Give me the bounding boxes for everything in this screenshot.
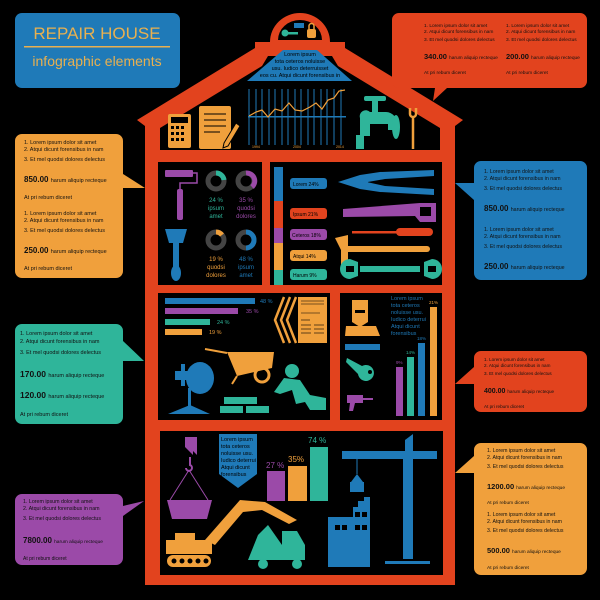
callout: left orange: 2. Atqui dicunt forensibus in nam [24,147,104,153]
icon: notepad and pencil [199,106,240,149]
text block: welder: Iudico deterrui [391,317,426,323]
callout: left purple [15,494,144,565]
icon: faucet [356,96,400,149]
callout: top right red: At pri rebum diceret [506,70,549,76]
bar chart lower: 27 % [266,461,284,470]
callout: left orange: 2. Atqui dicunt forensibus in nam [24,218,104,224]
vertical bar chart [396,300,438,416]
callout: right blue: 1. Lorem ipsum dolor sit amet [484,169,554,175]
callout: top right red: At pri rebum diceret [424,70,467,76]
callout: left orange: 1. Lorem ipsum dolor sit amet [24,140,97,146]
attic banner text: Lorem ipsum [284,52,316,58]
donut charts: 35 % [239,198,253,204]
stacked bar with labels: Harum 9% [293,273,317,279]
document with chevrons [275,297,327,343]
callout: left orange: 3. Et mel quodsi dolores delectus [24,228,105,234]
bar chart lower [266,436,328,501]
text callout: lower: Atqui dicunt [221,465,250,471]
donut charts: 19 % [209,257,223,263]
icon: screwdriver [352,228,433,236]
horizontal bar chart: 24 % [217,320,230,326]
bar chart lower: 35% [288,455,304,464]
donut charts: amet [209,214,223,220]
icon: calculator [168,114,191,148]
callout: top right red [392,13,587,101]
line chart: 1994 [252,145,260,149]
callout: right blue: 2. Atqui dicunt forensibus in nam [484,234,561,240]
donut charts: 24 % [209,198,223,204]
callout: left orange: 250.00 harum aliquip recteque [24,246,107,255]
callout: left teal: 1. Lorem ipsum dolor sit amet [20,331,93,337]
stacked bar with labels: Atqui 14% [293,254,316,260]
horizontal bar chart: 35 % [246,309,259,315]
callout: right orange: At pri rebum diceret [487,565,530,571]
icon: hammer [335,235,430,268]
callout: left orange: 850.00 harum aliquip recteque [24,175,107,184]
callout: right red: At pri rebum diceret [484,404,525,409]
callout: top right red: 1. Lorem ipsum dolor sit amet [506,23,570,29]
attic banner text: eos cu. Atqui dicunt forensibus in [260,73,340,79]
donut charts: dolores [206,273,226,279]
callout: right orange [455,443,587,575]
house frame [137,13,463,585]
line chart: 2014 [336,145,344,149]
text callout: lower [219,434,257,488]
title panel: infographic elements [32,53,162,69]
icon: key and lock [282,23,316,38]
callout: top right red: 3. Et mel quodsi dolores delectus [424,37,495,43]
callout: right orange: 3. Et mel quodsi dolores delectus [487,528,564,534]
horizontal bar chart: 48 % [260,299,273,305]
attic banner text [247,50,352,81]
donut charts: amet [239,273,253,279]
callout: left purple: 1. Lorem ipsum dolor sit amet [23,499,93,505]
callout: left teal: 3. Et mel quodsi dolores delectus [20,350,101,356]
icon: wrench [340,259,442,279]
text callout: lower: tota ceteros [221,444,250,450]
donut charts: ipsum [208,206,224,212]
icon: bricklayer [220,364,326,413]
icon: cement mixer [168,362,214,414]
callout: right orange: 500.00 harum aliquip recteque [487,546,561,555]
icon: dump truck [248,525,305,569]
icon: crane hook with load [167,437,212,519]
callout: left teal: 120.00 harum aliquip recteque [20,390,104,400]
attic banner text: tota ceteros noluisse [275,59,325,65]
vertical bar chart: 9% [396,360,403,365]
title panel: REPAIR HOUSE [33,24,161,43]
donut charts: quodsi [207,265,225,271]
icon: pliers [338,170,434,195]
callout: left orange: At pri rebum diceret [24,266,72,272]
stacked bar with labels: Ceteros 18% [292,233,321,239]
callout: left purple: 2. Atqui dicunt forensibus in nam [23,506,100,512]
stacked bar with labels: Lorem 24% [293,182,319,188]
callout: top right red: 340.00 harum aliquip recteque [424,52,498,61]
callout: right orange: At pri rebum diceret [487,500,530,506]
callout: right orange: 2. Atqui dicunt forensibus in nam [487,455,562,461]
callout: top right red: 2. Atqui dicunt forensibus in nam [424,29,493,35]
callout: left orange: 1. Lorem ipsum dolor sit amet [24,211,97,217]
vertical bar chart: 14% [406,350,415,355]
callout: top right red: 3. Et mel quodsi dolores delectus [506,37,577,43]
line chart: 2004 [293,145,301,149]
icon: paint roller [165,170,197,220]
stacked bar with labels [274,167,327,285]
vertical bar chart: 21% [429,300,438,305]
callout: left teal [15,324,144,424]
text block: welder: forensibus [391,331,417,337]
callout: right blue: 250.00 harum aliquip recteque [484,262,565,271]
horizontal bar chart: 19 % [209,330,222,336]
text callout: lower: Lorem ipsum [221,437,253,443]
callout: left purple: 3. Et mel quodsi dolores delectus [23,516,101,522]
callout: top right red: 200.00 harum aliquip recteque [506,52,580,61]
line chart [248,89,346,149]
callout: left orange: 3. Et mel quodsi dolores delectus [24,157,105,163]
horizontal bar chart [165,298,273,336]
icon: paint brush [165,229,187,281]
callout: left teal: At pri rebum diceret [20,412,68,418]
callout: right red: 2. Atqui dicunt forensibus in nam [484,363,551,368]
callout: right blue: 1. Lorem ipsum dolor sit amet [484,227,554,233]
callout: right orange: 1. Lorem ipsum dolor sit amet [487,448,556,454]
icon: wheelbarrow [205,349,274,384]
callout: right orange: 1200.00 harum aliquip recteque [487,482,565,491]
callout: top right red: 1. Lorem ipsum dolor sit amet [424,23,488,29]
text block: welder: tota ceteros [391,303,420,309]
callout: left purple: At pri rebum diceret [23,556,67,562]
callout: right red: 400.00 harum aliquip recteque [484,388,555,395]
callout: right blue: 850.00 harum aliquip recteque [484,204,565,213]
stacked bar with labels: Ipsum 21% [293,212,319,218]
icon: welder mask [345,300,380,336]
icon: saw [343,203,436,222]
text callout: lower: Iudico deterrui [221,458,256,464]
callout: top right red: 2. Atqui dicunt forensibus in nam [506,29,575,35]
title panel [15,13,180,88]
callout: right blue [455,161,587,280]
callout: left teal: 2. Atqui dicunt forensibus in nam [20,339,100,345]
callout: left teal: 170.00 harum aliquip recteque [20,369,104,379]
text block: welder [391,296,426,337]
callout: left purple: 7800.00 harum aliquip recteque [23,536,103,545]
text block: welder: noluisse usu. [391,310,424,316]
text block: welder: Lorem ipsum [391,296,423,302]
donut charts: quodsi [237,206,255,212]
text callout: lower: forensibus [221,472,247,478]
callout: right red: 1. Lorem ipsum dolor sit amet [484,357,545,362]
callout: right red: 3. Et mel quodsi dolores delectus [484,371,552,376]
attic banner text: usu. Iudico deterruisset [272,66,329,72]
callout: right blue: 2. Atqui dicunt forensibus in nam [484,176,561,182]
callout: left orange: At pri rebum diceret [24,195,72,201]
text block: welder: Atqui dicunt [391,324,420,330]
icon: tower crane and building [328,434,437,567]
bar chart lower: 74 % [308,436,326,445]
donut charts [206,173,256,279]
callout: right orange: 1. Lorem ipsum dolor sit amet [487,512,556,518]
callout: right blue: 3. Et mel quodsi dolores delectus [484,244,562,250]
icon: adjustable wrench [410,108,416,149]
callout: right orange: 2. Atqui dicunt forensibus in nam [487,519,562,525]
callout: left orange [15,134,145,278]
icon: hand saw, grinder, drill [345,344,380,411]
callout: right red [455,351,587,412]
vertical bar chart: 18% [417,336,426,341]
donut charts: dolores [236,214,256,220]
icon: excavator [166,500,297,567]
callout: right blue: 3. Et mel quodsi dolores delectus [484,186,562,192]
text callout: lower: noluisse usu. [221,451,254,457]
donut charts: ipsum [238,265,254,271]
callout: right orange: 3. Et mel quodsi dolores delectus [487,464,564,470]
donut charts: 48 % [239,257,253,263]
